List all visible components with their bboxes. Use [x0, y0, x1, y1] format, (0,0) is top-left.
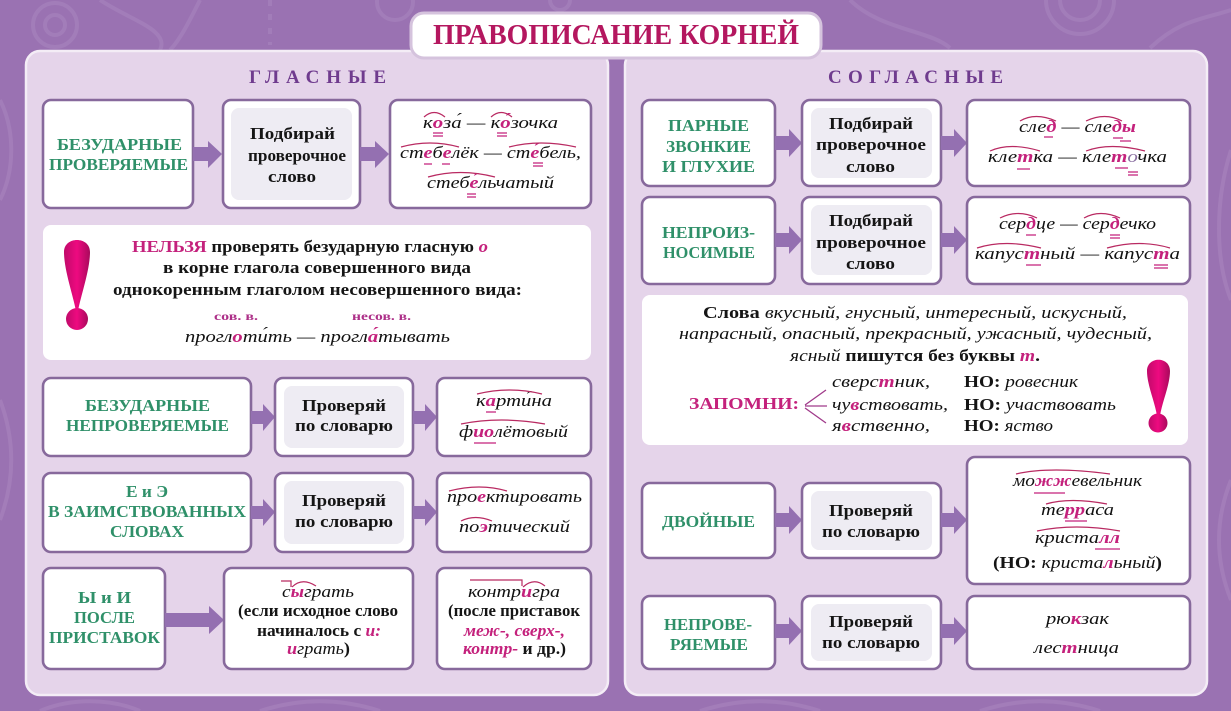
row: unstressed checkable vowels: слово — [268, 167, 316, 186]
callout: do not check: сов. в. — [214, 311, 258, 323]
callout: words without letter t: НО: участвовать — [964, 395, 1116, 414]
row: unstressed checkable vowels: коза́ — к о́зочка — [423, 112, 558, 132]
row: double consonants: криста лл — [1035, 528, 1120, 547]
row: unstressed checkable vowels: проверочное — [248, 146, 346, 165]
row: paired voiced and voiceless consonants: слово — [846, 157, 895, 176]
row: unpronounceable consonants — [642, 197, 1190, 284]
callout: words without letter t: напрасный, опасный, прекрасный, ужасный, чудесный, — [679, 324, 1152, 343]
callout: words without letter t: ясный пишутся без буквы т. — [789, 346, 1040, 365]
row: unstressed uncheckable vowels: НЕПРОВЕРЯЕМЫЕ — [66, 416, 229, 435]
row: paired voiced and voiceless consonants: сле д — сле ды — [1019, 117, 1136, 136]
row: E and E in loanwords — [43, 473, 591, 552]
callout: words without letter t — [642, 295, 1188, 445]
row: uncheckable consonants — [642, 596, 1190, 669]
row: unstressed uncheckable vowels: карти́на — [476, 390, 552, 410]
icon: exclamation mark — [64, 240, 90, 330]
row: double consonants: можж евельник — [1012, 471, 1143, 490]
row: Y and I after prefixes: (если исходное слово — [238, 601, 398, 620]
row: uncheckable consonants: рюкзак — [1045, 609, 1110, 628]
row: paired voiced and voiceless consonants: ЗВОНКИЕ — [666, 137, 751, 156]
callout: words without letter t: НО: ровесник — [964, 372, 1079, 391]
row: unpronounceable consonants: НЕПРОИЗ- — [662, 223, 755, 242]
callout: do not check: несов. в. — [352, 311, 411, 323]
row: unstressed checkable vowels: Подбирай — [250, 124, 336, 143]
row: Y and I after prefixes: ПРИСТАВОК — [49, 628, 160, 647]
row: Y and I after prefixes: меж-, сверх-, — [463, 621, 565, 640]
row: unstressed checkable vowels: стебелёк — ст е́бель, — [400, 142, 581, 162]
row: E and E in loanwords: В ЗАИМСТВОВАННЫХ — [48, 502, 246, 521]
row: unpronounceable consonants: капус тный — капус та — [975, 244, 1180, 263]
row: paired voiced and voiceless consonants — [642, 100, 1190, 186]
title: ПРАВОПИСАНИЕ КОРНЕЙ — [433, 20, 799, 51]
row: paired voiced and voiceless consonants: кле тка — кле точка — [988, 147, 1167, 166]
callout: words without letter t: ЗАПОМНИ: — [689, 394, 799, 413]
panel: vowels — [26, 51, 608, 695]
row: E and E in loanwords: Проверяй — [302, 491, 387, 510]
row: Y and I after prefixes: сыграть — [282, 582, 354, 601]
row: unstressed uncheckable vowels: Проверяй — [302, 396, 387, 415]
row: paired voiced and voiceless consonants: проверочное — [816, 135, 926, 154]
row: double consonants: по словарю — [822, 522, 920, 541]
row: E and E in loanwords: СЛОВАХ — [110, 522, 184, 541]
row: unpronounceable consonants: слово — [846, 254, 895, 273]
row: E and E in loanwords: поэтический — [459, 517, 571, 536]
row: uncheckable consonants: Проверяй — [829, 612, 914, 631]
heading: consonants: СОГЛАСНЫЕ — [828, 67, 1003, 88]
row: E and E in loanwords: по словарю — [295, 512, 393, 531]
row: paired voiced and voiceless consonants: И ГЛУХИЕ — [662, 157, 755, 176]
row: Y and I after prefixes: контр- и др.) — [463, 639, 566, 658]
row: Y and I after prefixes: играть) — [287, 639, 350, 658]
row: unstressed uncheckable vowels: по словарю — [295, 416, 393, 435]
callout: words without letter t: Слова вкусный, гнусный, интересный, искусный, — [703, 303, 1127, 322]
callout: do not check — [43, 225, 591, 360]
row: unpronounceable consonants: Подбирай — [829, 211, 914, 230]
row: Y and I after prefixes: ПОСЛЕ — [74, 608, 135, 627]
row: uncheckable consonants: лес тница — [1033, 638, 1119, 657]
title — [411, 13, 821, 58]
row: uncheckable consonants: НЕПРОВЕ- — [664, 615, 752, 634]
row: double consonants: ДВОЙНЫЕ — [662, 512, 755, 531]
row: unpronounceable consonants: НОСИМЫЕ — [663, 243, 755, 262]
row: Y and I after prefixes: (после приставок — [448, 601, 581, 620]
row: E and E in loanwords: Е и Э — [126, 482, 168, 501]
row: double consonants: Проверяй — [829, 501, 914, 520]
row: unstressed uncheckable vowels — [43, 378, 591, 456]
row: Y and I after prefixes: Ы и И — [78, 588, 131, 607]
callout: do not check: НЕЛЬЗЯ проверять безударную гласную о — [132, 237, 488, 256]
row: Y and I after prefixes: начиналось с и: — [257, 621, 381, 640]
callout: words without letter t: чувствовать, — [832, 395, 948, 414]
row: uncheckable consonants: РЯЕМЫЕ — [670, 635, 748, 654]
row: double consonants: терраса — [1041, 500, 1114, 519]
row: E and E in loanwords: про ектировать — [447, 487, 582, 506]
row: unstressed checkable vowels: ПРОВЕРЯЕМЫЕ — [49, 155, 188, 174]
row: unstressed uncheckable vowels: фиолётовый — [459, 422, 569, 441]
row: unstressed uncheckable vowels: БЕЗУДАРНЫЕ — [85, 396, 210, 415]
callout: do not check: прогл оти́ть — прогл а́тывать — [185, 326, 450, 346]
callout: do not check: однокоренным глаголом несовершенного вида: — [113, 280, 522, 299]
row: unstressed checkable vowels: БЕЗУДАРНЫЕ — [57, 135, 182, 154]
row: double consonants — [642, 457, 1190, 584]
row: uncheckable consonants: по словарю — [822, 633, 920, 652]
row: Y and I after prefixes — [43, 568, 591, 669]
panel: consonants — [625, 51, 1207, 695]
row: unpronounceable consonants: сердце — сер дечко — [999, 214, 1156, 233]
row: paired voiced and voiceless consonants: ПАРНЫЕ — [668, 116, 749, 135]
heading: vowels: ГЛАСНЫЕ — [249, 67, 386, 88]
callout: do not check: в корне глагола совершенного вида — [163, 258, 471, 277]
icon: exclamation mark — [1147, 360, 1170, 432]
callout: words without letter t: явственно, — [831, 416, 930, 435]
row: Y and I after prefixes: контр игра — [468, 582, 560, 601]
row: paired voiced and voiceless consonants: Подбирай — [829, 114, 914, 133]
callout: words without letter t: сверс тник, — [832, 372, 930, 391]
callout: words without letter t: НО: яство — [964, 416, 1053, 435]
row: unpronounceable consonants: проверочное — [816, 233, 926, 252]
row: unstressed checkable vowels — [43, 100, 591, 208]
row: unstressed checkable vowels: стеб е́льчатый — [427, 172, 555, 192]
row: double consonants: (НО: криста льный ) — [993, 553, 1162, 572]
